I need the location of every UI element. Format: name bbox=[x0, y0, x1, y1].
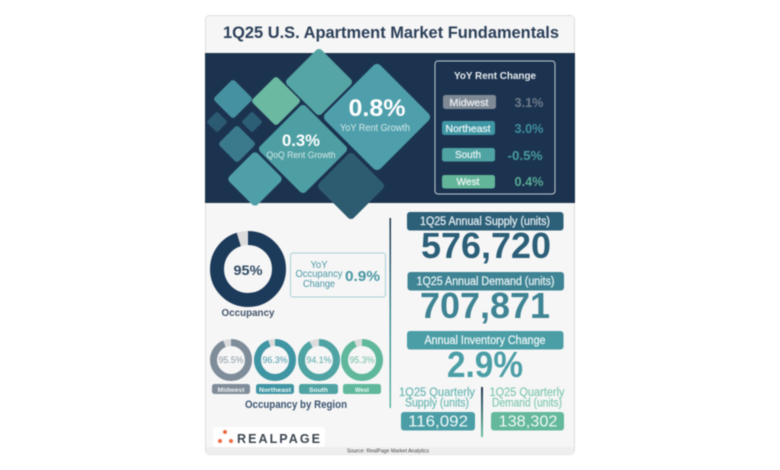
stat: annual supply: 576,720 bbox=[421, 225, 551, 266]
YoY rent growth stat bbox=[340, 95, 410, 134]
logo: RealPage bbox=[213, 427, 325, 447]
source strip bbox=[206, 447, 574, 454]
stat: quarterly demand: 1Q25 Quarterly bbox=[490, 387, 565, 399]
panel: YoY rent change bbox=[435, 61, 555, 194]
stat: quarterly demand bbox=[490, 387, 565, 430]
panel: rent growth diamonds bbox=[206, 47, 432, 221]
title: 1Q25 U.S. Apartment Market Fundamentals bbox=[223, 23, 559, 42]
donut: Northeast: 96.3% bbox=[262, 355, 288, 366]
stat: quarterly supply: 1Q25 Quarterly bbox=[399, 387, 475, 399]
donut: Northeast: Northeast bbox=[259, 387, 292, 394]
row: Midwest: Midwest bbox=[450, 97, 489, 109]
callout: YoY occupancy change: YoY bbox=[310, 259, 328, 271]
donut: South: South bbox=[309, 387, 328, 394]
stat: quarterly demand: 138,302 bbox=[498, 414, 558, 430]
row: South: -0.5% bbox=[508, 148, 543, 163]
logo: RealPage: REALPAGE bbox=[237, 432, 320, 446]
stat: quarterly supply bbox=[399, 387, 475, 430]
QoQ rent growth stat: QoQ Rent Growth bbox=[266, 150, 336, 161]
donut: Midwest: Midwest bbox=[218, 387, 245, 394]
stat: annual demand: 1Q25 Annual Demand (units) bbox=[416, 276, 555, 288]
panel heading: YoY Rent Change bbox=[454, 70, 536, 82]
row: Northeast: Northeast bbox=[446, 123, 491, 135]
YoY rent growth stat: 0.8% bbox=[348, 95, 406, 122]
row: West: 0.4% bbox=[514, 174, 544, 189]
callout: YoY occupancy change: Change bbox=[303, 278, 335, 290]
row: Midwest bbox=[443, 95, 544, 110]
panel: rent growth banner bbox=[205, 53, 575, 203]
stat: quarterly supply: Supply (units) bbox=[405, 398, 469, 410]
chart: occupancy donut: Occupancy bbox=[222, 307, 275, 319]
stat: annual inventory change bbox=[407, 331, 564, 385]
stat: annual supply: 1Q25 Annual Supply (units) bbox=[420, 216, 550, 228]
QoQ rent growth stat bbox=[266, 131, 336, 161]
row: Northeast: 3.0% bbox=[514, 121, 544, 136]
source note: Source: RealPage Market Analytics bbox=[347, 448, 430, 454]
card background bbox=[206, 16, 574, 454]
donut: Midwest: 95.5% bbox=[218, 355, 244, 366]
callout: YoY occupancy change: Occupancy bbox=[296, 268, 343, 280]
stat: annual inventory change: Annual Inventory Change bbox=[424, 335, 546, 347]
donut: Northeast bbox=[256, 342, 294, 394]
row: Northeast bbox=[442, 121, 544, 136]
stat: annual supply bbox=[407, 212, 564, 266]
donut: South: 94.1% bbox=[306, 355, 332, 366]
stat: quarterly demand: Demand (units) bbox=[492, 398, 562, 410]
QoQ rent growth stat: 0.3% bbox=[282, 131, 320, 150]
callout: YoY occupancy change bbox=[290, 253, 386, 297]
donut: Midwest bbox=[212, 342, 250, 394]
stat: annual inventory change: 2.9% bbox=[447, 344, 523, 385]
stat: annual demand: 707,871 bbox=[420, 285, 550, 326]
row: West bbox=[442, 174, 544, 189]
chart: occupancy donut bbox=[217, 238, 279, 319]
stat: annual demand bbox=[408, 272, 564, 326]
stat: quarterly supply: 116,092 bbox=[408, 414, 468, 430]
donut: West bbox=[343, 342, 381, 394]
chart heading: Occupancy by Region bbox=[245, 399, 347, 411]
row: South: South bbox=[455, 149, 481, 161]
YoY rent growth stat: YoY Rent Growth bbox=[340, 123, 410, 134]
donut: West: West bbox=[355, 387, 370, 394]
donut: West: 95.3% bbox=[350, 355, 375, 366]
row: Midwest: 3.1% bbox=[514, 95, 544, 110]
row: South bbox=[442, 148, 543, 163]
chart: occupancy by region bbox=[212, 342, 381, 411]
donut: South bbox=[299, 342, 338, 394]
callout: YoY occupancy change: 0.9% bbox=[345, 268, 380, 285]
chart: occupancy donut: 95% bbox=[234, 262, 263, 278]
row: West: West bbox=[456, 176, 480, 188]
